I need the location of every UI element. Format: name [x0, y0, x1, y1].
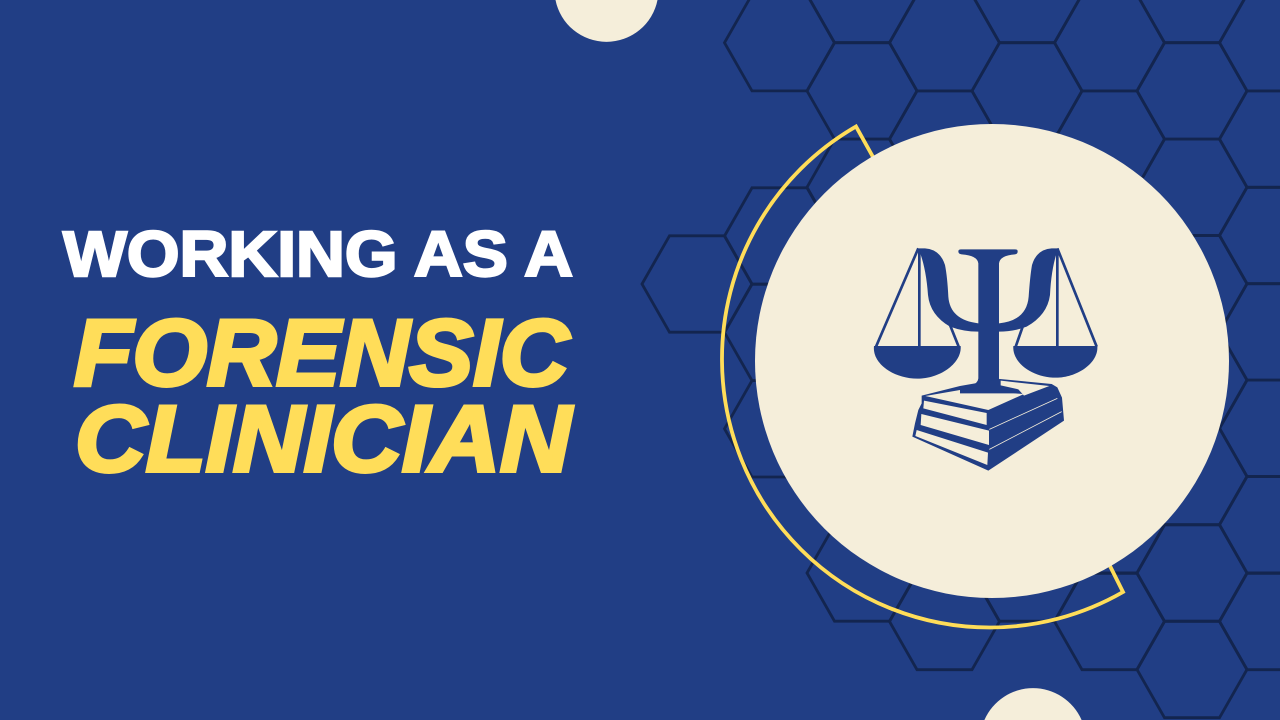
yellow arc outline — [722, 126, 1123, 628]
left scale pan — [874, 346, 961, 379]
right scale pan — [1013, 346, 1097, 378]
book top covers — [925, 381, 1049, 410]
right scale strings — [1016, 248, 1097, 347]
book spine highlights — [989, 398, 1062, 449]
heading line: forensic: FORENSIC — [74, 300, 570, 405]
stack of books — [912, 379, 1064, 471]
heading line: working as a: WORKING AS A — [63, 218, 573, 290]
psi right arm — [999, 248, 1058, 332]
icon: psi symbol with scales of justice on stacked books — [874, 248, 1097, 471]
decorative circle: top — [556, 0, 658, 42]
left scale strings — [876, 248, 959, 347]
book page edges — [915, 401, 989, 465]
heading line: clinician: CLINICIAN — [75, 386, 573, 491]
psi symbol — [918, 248, 1018, 394]
hexagon pattern — [642, 0, 1280, 718]
main cream circle — [755, 124, 1229, 598]
decorative circle: bottom — [984, 688, 1082, 720]
